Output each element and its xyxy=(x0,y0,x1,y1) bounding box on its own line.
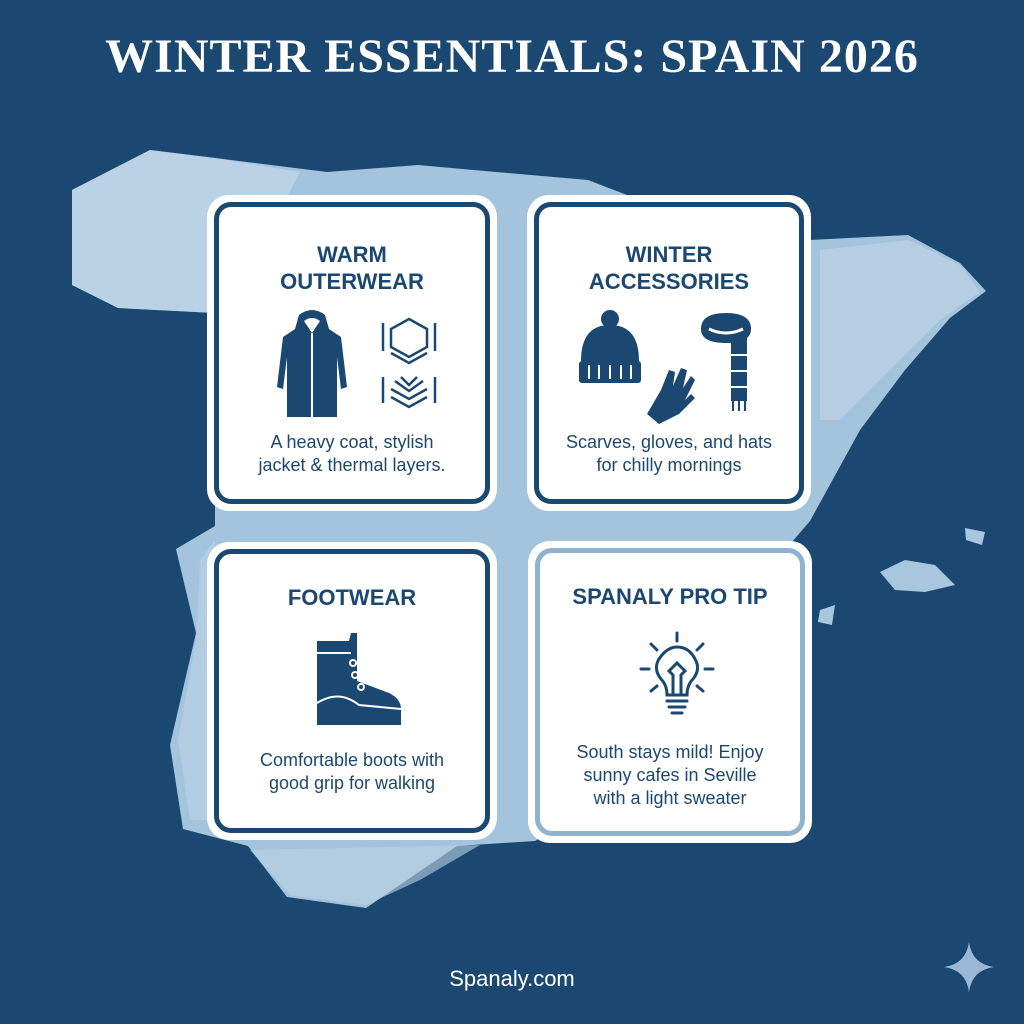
description xyxy=(260,750,444,793)
description: Scarves, gloves, and hats xyxy=(566,432,772,452)
description xyxy=(566,432,772,475)
heading: WINTER xyxy=(626,242,712,267)
icon: boot xyxy=(317,633,401,725)
description xyxy=(576,742,764,808)
description: sunny cafes in Seville xyxy=(583,765,757,785)
description: for chilly mornings xyxy=(596,455,742,475)
icon: hat xyxy=(579,310,641,383)
panel: footwear xyxy=(207,542,497,840)
heading: OUTERWEAR xyxy=(280,269,424,294)
panel: winter accessories xyxy=(527,195,811,511)
icon: scarf xyxy=(701,313,751,411)
heading: WARM xyxy=(317,242,387,267)
panel: warm outerwear xyxy=(207,195,497,511)
heading xyxy=(280,242,424,294)
icon: sparkle xyxy=(944,942,994,992)
description: good grip for walking xyxy=(269,773,435,793)
panel: pro tip xyxy=(528,541,812,843)
icon: coat xyxy=(277,310,347,417)
icon: glove xyxy=(647,368,695,424)
heading: ACCESSORIES xyxy=(589,269,749,294)
heading xyxy=(589,242,749,294)
icon: thermal layers xyxy=(382,318,436,408)
description: jacket & thermal layers. xyxy=(258,455,446,475)
heading: SPANALY PRO TIP xyxy=(572,584,768,609)
title: WINTER ESSENTIALS: SPAIN 2026 xyxy=(105,30,919,83)
description: A heavy coat, stylish xyxy=(270,432,434,452)
heading: FOOTWEAR xyxy=(288,585,416,610)
icon: light bulb xyxy=(640,632,714,714)
footer: Spanaly.com xyxy=(449,966,575,991)
description xyxy=(258,432,446,475)
description: Comfortable boots with xyxy=(260,750,444,770)
description: with a light sweater xyxy=(593,788,747,808)
description: South stays mild! Enjoy xyxy=(576,742,764,762)
